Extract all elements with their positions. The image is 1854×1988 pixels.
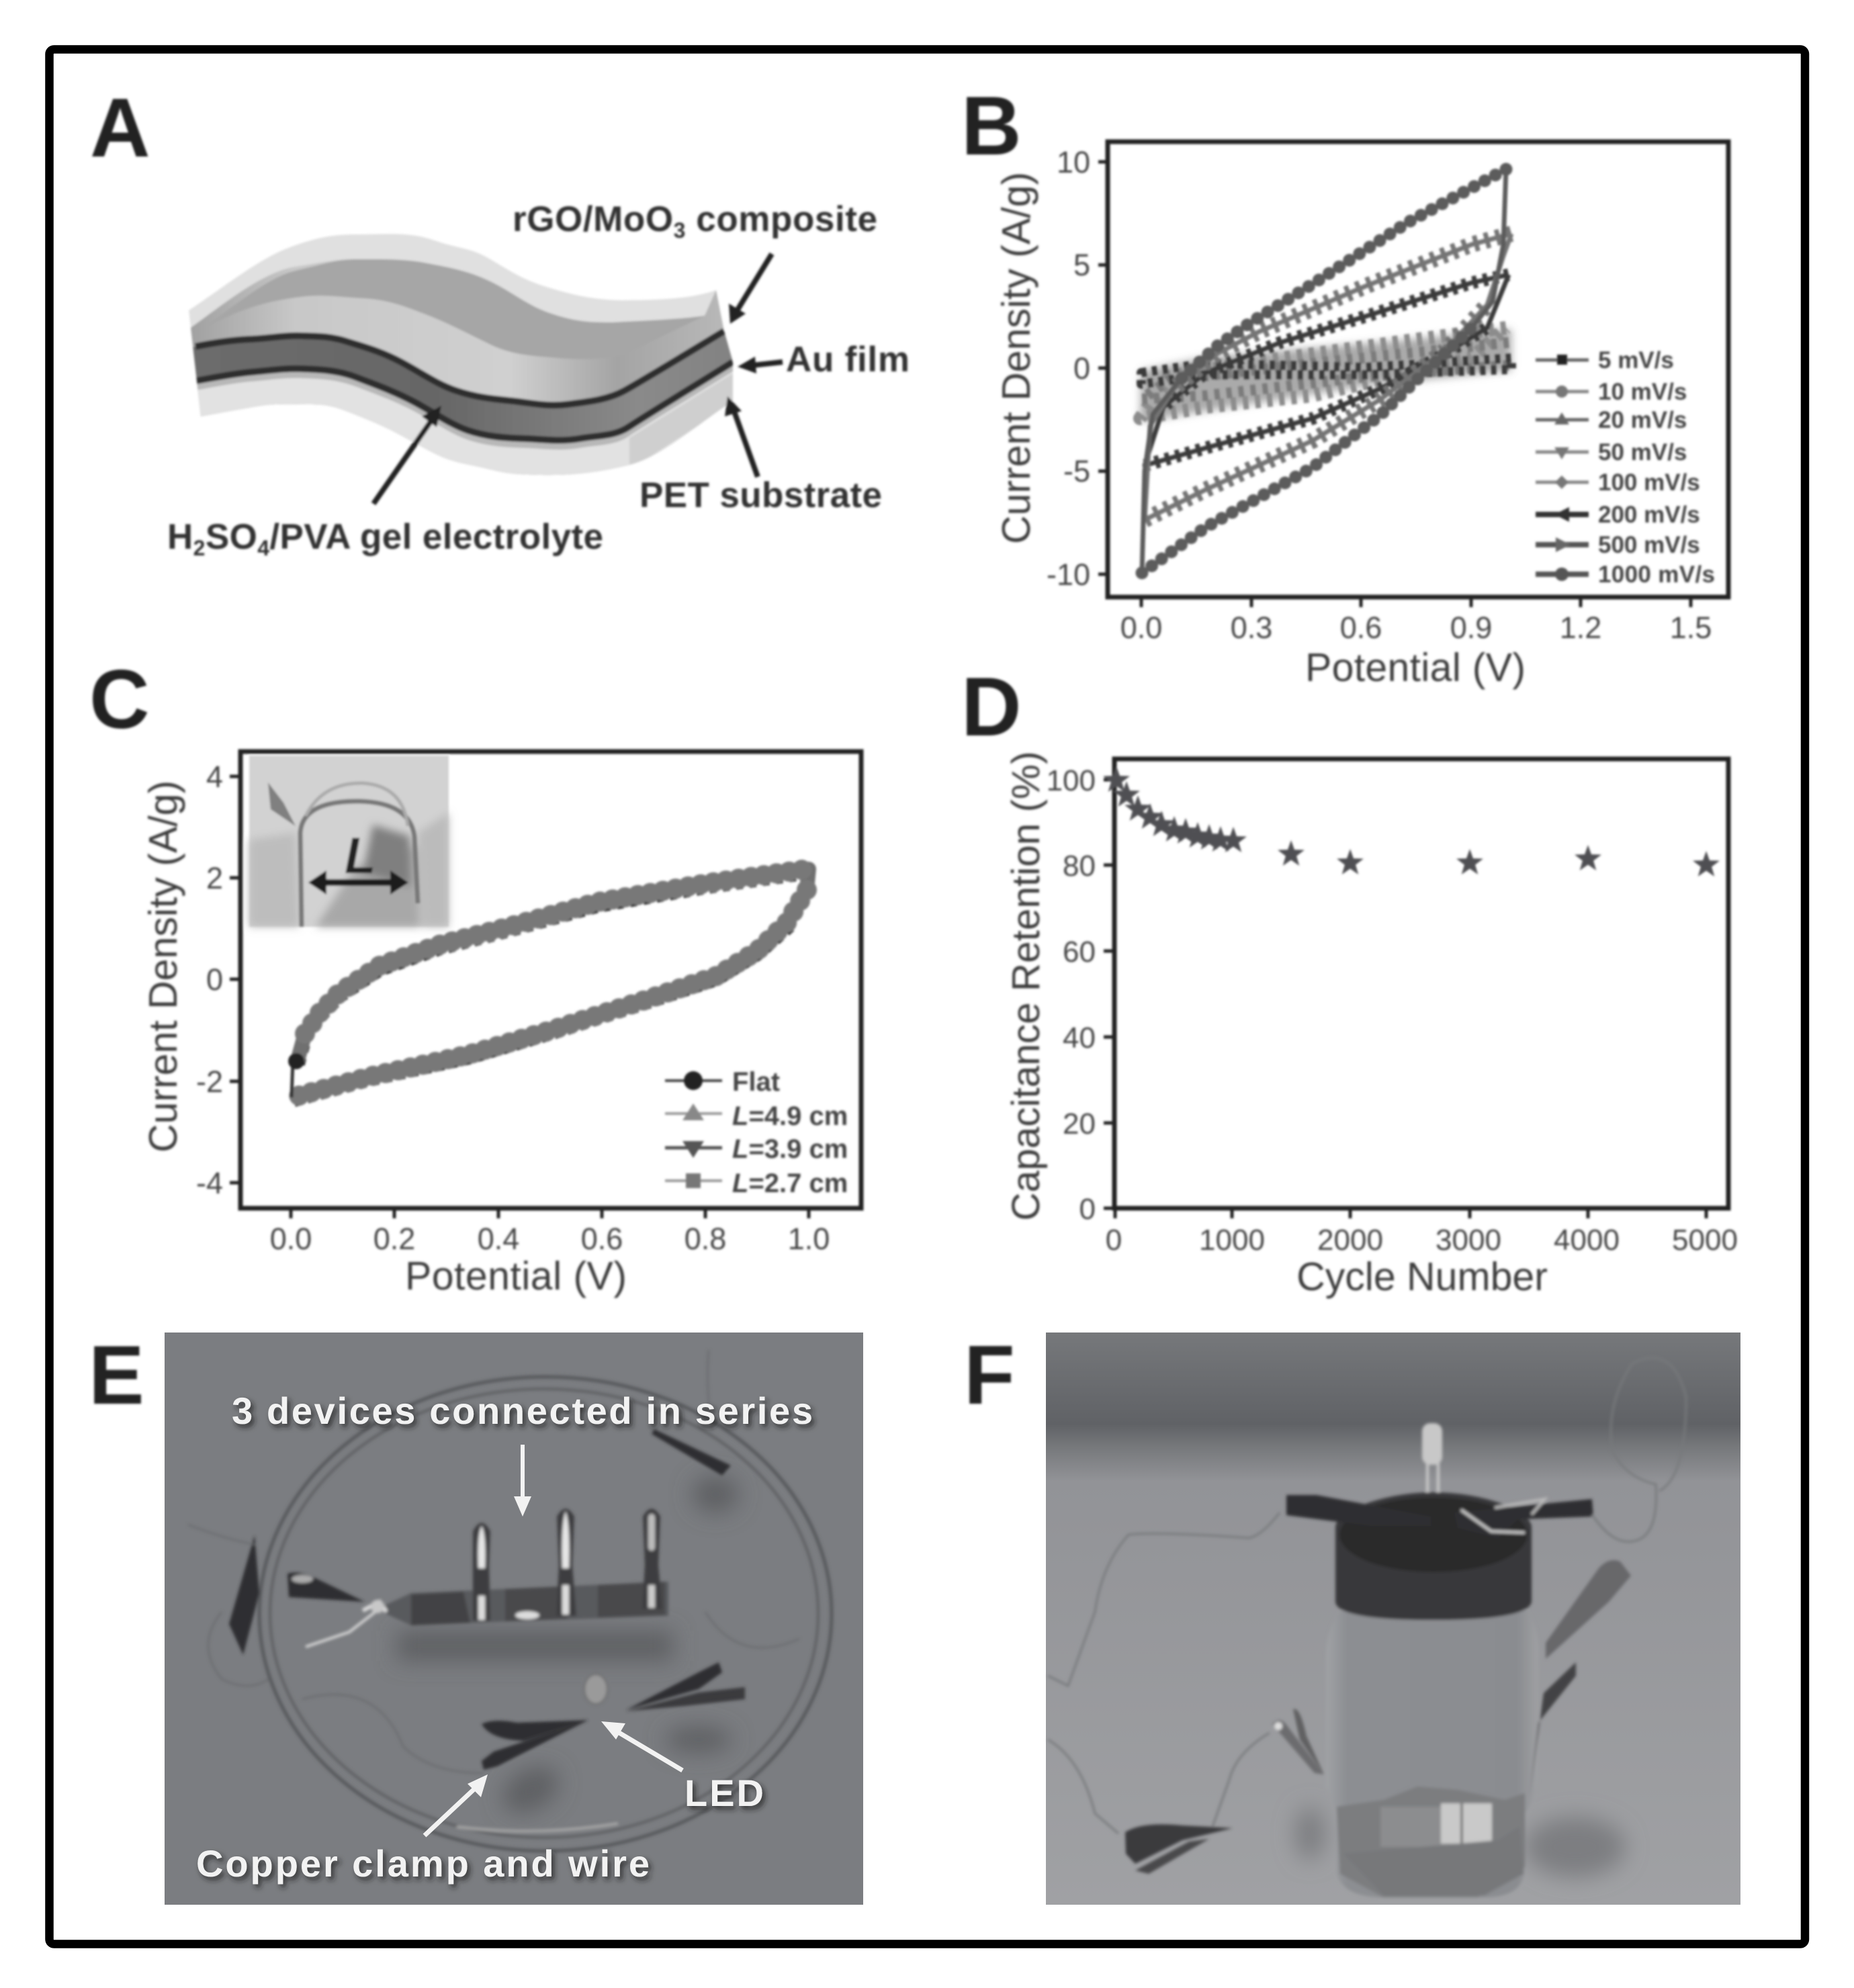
- glass jar: [1326, 1609, 1538, 1897]
- lower LED clamps: [482, 1662, 745, 1770]
- label: PET substrate with arrow: PET substrate: [639, 476, 882, 515]
- legend row L=2.7 cm: L=2.7 cm: [732, 1169, 848, 1198]
- caption: copper clamp: Copper clamp and wire: [196, 1842, 650, 1885]
- legend row 20 mV/s: 20 mV/s: [1598, 407, 1687, 433]
- x axis numbers: [270, 1222, 830, 1256]
- legend: [665, 1067, 848, 1198]
- y axis numbers: [1047, 145, 1090, 592]
- legend row 5 mV/s: 5 mV/s: [1598, 347, 1674, 373]
- label: gel electrolyte with arrow: SO: [206, 517, 257, 557]
- thin wires: [1048, 1358, 1686, 1834]
- label: gel electrolyte with arrow: 4: [257, 536, 269, 560]
- x axis numbers: [1106, 1224, 1738, 1257]
- x axis title: Potential (V): [405, 1254, 627, 1298]
- label: Au film with arrow: Au film: [786, 340, 910, 379]
- x axis numbers: 4000: [1554, 1224, 1620, 1257]
- label: rGO/MoO3 composite with arrow: rGO/MoO: [513, 199, 673, 239]
- x axis numbers: 1.5: [1670, 611, 1712, 645]
- legend row 20 mV/s: [1536, 407, 1687, 433]
- y axis title: Current Density (A/g): [141, 780, 185, 1153]
- panel C: CV curves under bending: [89, 653, 861, 1298]
- y axis numbers: 80: [1063, 850, 1096, 883]
- white arrows: [425, 1445, 682, 1836]
- inset dimension L: [308, 827, 408, 895]
- label: gel electrolyte with arrow: /PVA gel electrolyte: [269, 517, 603, 557]
- x axis numbers: 0.4: [478, 1222, 519, 1256]
- y axis numbers: 10: [1057, 145, 1090, 179]
- x axis title: Cycle Number: [1296, 1255, 1548, 1299]
- caption: 3 devices: 3 devices connected in series: [232, 1390, 813, 1432]
- panel letter E: E: [89, 1329, 144, 1422]
- y axis numbers: [196, 760, 223, 1200]
- legend row L=3.9 cm: [665, 1134, 848, 1164]
- y axis numbers: -10: [1047, 557, 1090, 592]
- x axis numbers: 0: [1106, 1224, 1122, 1257]
- legend row L=2.7 cm: [665, 1169, 848, 1198]
- thin wires: [188, 1350, 799, 1773]
- legend row Flat: [665, 1067, 780, 1097]
- legend row 1000 mV/s: 1000 mV/s: [1598, 561, 1715, 588]
- panel F: photo of jar with LED: [1046, 1332, 1740, 1905]
- x axis numbers: 1000: [1199, 1224, 1265, 1257]
- y axis numbers: -4: [196, 1166, 223, 1200]
- x axis numbers: 5000: [1672, 1224, 1738, 1257]
- legend row 200 mV/s: 200 mV/s: [1598, 502, 1700, 528]
- x axis numbers: 0.0: [270, 1222, 312, 1256]
- label: gel electrolyte with arrow: [167, 406, 603, 560]
- series clamps: [473, 1508, 662, 1621]
- y axis numbers: 20: [1063, 1108, 1096, 1140]
- plot frame and ticks: [230, 752, 861, 1218]
- x axis numbers: 0.0: [1120, 611, 1162, 645]
- x axis numbers: 0.6: [1340, 611, 1382, 645]
- legend row Flat: Flat: [732, 1067, 780, 1097]
- x axis title: Potential (V): [1305, 645, 1526, 690]
- left clamps: [229, 1535, 384, 1655]
- side clamps: [1125, 1560, 1631, 1874]
- legend row 500 mV/s: [1536, 532, 1700, 558]
- legend row 100 mV/s: [1536, 469, 1700, 496]
- x axis numbers: 2000: [1317, 1224, 1383, 1257]
- photo background: [165, 1332, 863, 1905]
- y axis numbers: -2: [196, 1065, 223, 1099]
- petri dish rings: [259, 1377, 832, 1851]
- legend: [1536, 347, 1715, 588]
- y axis title: Capacitance Retention (%): [1004, 751, 1048, 1221]
- label: gel electrolyte with arrow: H: [167, 517, 193, 557]
- panel A: device schematic: [90, 82, 910, 560]
- panel letter A: A: [90, 82, 150, 175]
- legend row L=4.9 cm: L=4.9 cm: [732, 1101, 848, 1131]
- soft shadows: [397, 1476, 739, 1822]
- y axis numbers: 0: [1079, 1193, 1096, 1226]
- legend row L=3.9 cm: L=3.9 cm: [732, 1134, 848, 1164]
- legend row 500 mV/s: 500 mV/s: [1598, 532, 1700, 558]
- legend row 50 mV/s: 50 mV/s: [1598, 439, 1687, 465]
- legend row 5 mV/s: [1536, 347, 1674, 373]
- legend row L=4.9 cm: [665, 1101, 848, 1131]
- CV curves: [1140, 169, 1511, 573]
- inset photo: bent device: [249, 756, 449, 927]
- x axis numbers: 0.2: [373, 1222, 415, 1256]
- x axis numbers: [1120, 611, 1712, 645]
- plot frame and ticks: [1104, 759, 1728, 1218]
- arrow to clamp: [425, 1774, 488, 1836]
- y axis numbers: -5: [1063, 454, 1090, 488]
- y axis title: Current Density (A/g): [994, 172, 1039, 544]
- label: rGO/MoO3 composite with arrow: 3: [674, 218, 685, 242]
- label: rGO/MoO3 composite with arrow: composite: [686, 199, 877, 239]
- x axis numbers: 1.2: [1560, 611, 1601, 645]
- label: rGO/MoO3 composite with arrow: [513, 199, 877, 324]
- legend row 10 mV/s: [1536, 379, 1687, 405]
- panel B: CV curves at different scan rates: [961, 80, 1728, 690]
- y axis numbers: 2: [206, 861, 223, 895]
- label: gel electrolyte with arrow: 2: [193, 536, 205, 560]
- top right clamp: [652, 1429, 731, 1476]
- legend row 10 mV/s: 10 mV/s: [1598, 379, 1687, 405]
- photo background: [1046, 1332, 1740, 1905]
- y axis numbers: 0: [1073, 351, 1090, 386]
- y axis numbers: 0: [206, 962, 223, 997]
- lid clamps: [1286, 1495, 1593, 1538]
- legend row 100 mV/s: 100 mV/s: [1598, 469, 1700, 496]
- inset dimension L: L: [345, 827, 376, 885]
- panel letter D: D: [961, 661, 1022, 754]
- panel E: photo of devices in dish: [165, 1332, 863, 1905]
- legend row 1000 mV/s: [1536, 561, 1715, 588]
- plot frame and ticks: [1098, 142, 1728, 607]
- legend row 200 mV/s: [1536, 502, 1700, 528]
- panel letter C: C: [89, 653, 150, 746]
- arrow to devices: [514, 1445, 531, 1517]
- jar shadow: [1295, 1807, 1626, 1877]
- three devices strip: [306, 1582, 668, 1647]
- x axis numbers: 0.8: [685, 1222, 726, 1256]
- arrow to LED: [601, 1721, 682, 1770]
- CV loops: [288, 869, 809, 1100]
- caption: LED: LED: [685, 1772, 764, 1814]
- y axis numbers: 100: [1047, 764, 1096, 797]
- panel D: capacitance retention: [961, 661, 1738, 1299]
- y axis numbers: [1047, 764, 1096, 1226]
- x axis numbers: 0.9: [1450, 611, 1492, 645]
- x axis numbers: 0.6: [581, 1222, 623, 1256]
- y axis numbers: 5: [1073, 248, 1090, 282]
- LED on lid: [1422, 1423, 1442, 1492]
- panel letter F: F: [964, 1329, 1015, 1422]
- label: PET substrate with arrow: [639, 396, 882, 515]
- y axis numbers: 60: [1063, 936, 1096, 968]
- legend row 50 mV/s: [1536, 439, 1687, 465]
- x axis numbers: 0.3: [1231, 611, 1272, 645]
- y axis numbers: 4: [206, 760, 223, 794]
- flexible layered device: [188, 234, 735, 476]
- star data points: [1103, 766, 1720, 876]
- panel letter B: B: [961, 80, 1022, 173]
- y axis numbers: 40: [1063, 1022, 1096, 1054]
- black lid: [1335, 1492, 1532, 1620]
- x axis numbers: 3000: [1436, 1224, 1501, 1257]
- x axis numbers: 1.0: [788, 1222, 830, 1256]
